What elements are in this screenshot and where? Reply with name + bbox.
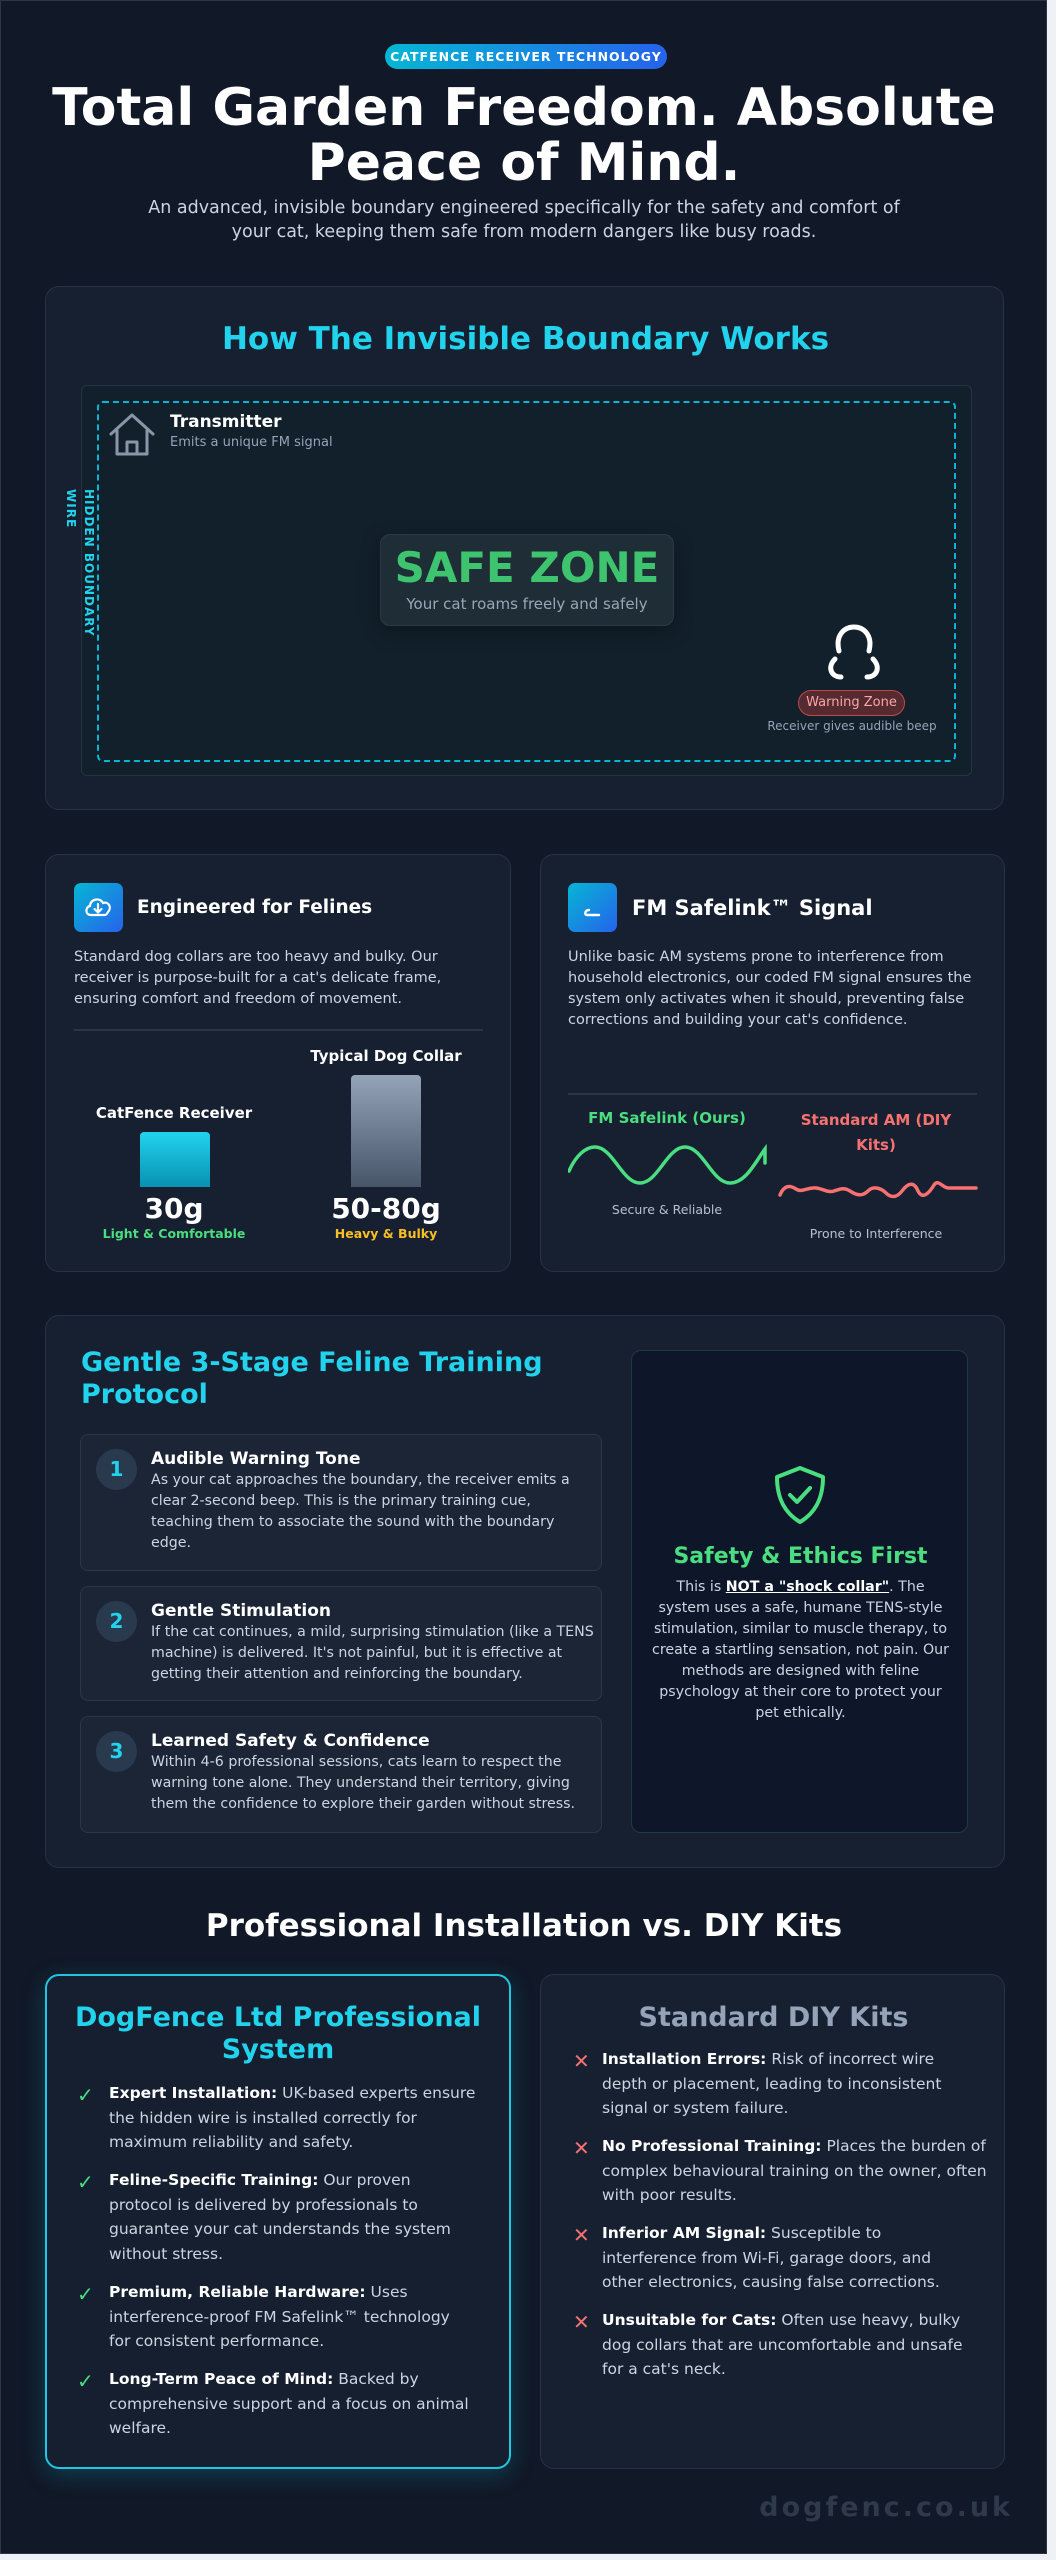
chart: signal comparison: Secure & Reliable: [612, 1202, 722, 1217]
item 4: ✓: [77, 2369, 94, 2393]
panel: engineered for felines: [45, 854, 511, 1272]
chart: weight comparison: [96, 1047, 462, 1241]
step 1: Audible Warning Tone: [151, 1449, 360, 1469]
item 3: Premium, Reliable Hardware: Uses interference-proof FM Safelink™ technology for consistent performance.: [109, 2283, 450, 2350]
transmitter label: Transmitter: [170, 412, 282, 432]
step 3: Within 4-6 professional sessions, cats learn to respect the warning tone alone. They understand their territory, giving them the confidence to explore their garden without stress.: [151, 1754, 575, 1812]
step 2: Gentle Stimulation: [151, 1601, 331, 1621]
item 2: ✓: [77, 2170, 94, 2194]
icon: shield: [775, 1466, 825, 1524]
chart: weight comparison: 50-80g: [331, 1192, 441, 1225]
safety text: This is NOT a "shock collar". The system uses a safe, humane TENS-style stimulation, similar to muscle therapy, to create a startling sensation, not pain. Our methods are designed with feline psychology at their core to protect your pet ethically.: [652, 1579, 949, 1721]
step 3: [80, 1716, 602, 1833]
badge: [385, 44, 667, 69]
panel: professional: [45, 1974, 511, 2469]
chart: weight comparison: Typical Dog Collar: [310, 1047, 462, 1065]
heading: comparison: Professional Installation vs. DIY Kits: [206, 1908, 842, 1944]
text: Standard dog collars are too heavy and bulky. Our receiver is purpose-built for a cat's delicate frame, ensuring comfort and freedom of movement.: [74, 949, 441, 1007]
chart: weight comparison: Heavy & Bulky: [335, 1226, 437, 1241]
step 3: Learned Safety & Confidence: [151, 1731, 430, 1751]
item 3: ✕: [573, 2223, 590, 2247]
chart: signal comparison: FM Safelink (Ours): [588, 1109, 746, 1127]
chart: weight comparison: Light & Comfortable: [103, 1226, 245, 1241]
warning zone: [798, 690, 905, 716]
chart: weight comparison: 30g: [144, 1192, 204, 1225]
heading: [81, 1347, 543, 1410]
icon: cloud: [74, 883, 123, 932]
label: hidden boundary wire: HIDDEN BOUNDARY: [82, 489, 96, 637]
heading: How The Invisible Boundary Works: [222, 321, 829, 357]
item 3: ✓: [77, 2282, 94, 2306]
item 4: Unsuitable for Cats: Often use heavy, bulky dog collars that are uncomfortable and unsafe for a cat's neck.: [602, 2311, 963, 2378]
label: hidden boundary wire: [64, 489, 96, 637]
step 2: [80, 1586, 602, 1701]
heading: Standard DIY Kits: [639, 2002, 908, 2033]
label: hidden boundary wire: WIRE: [64, 489, 78, 528]
panel: fm safelink: [540, 854, 1005, 1272]
icon: cat receiver: [828, 624, 880, 680]
safety heading: Safety & Ethics First: [673, 1544, 928, 1569]
panel: how it works: [45, 286, 1004, 810]
chart: weight comparison: CatFence Receiver: [96, 1104, 252, 1122]
safe zone: SAFE ZONE: [395, 543, 659, 592]
heading: DogFence Ltd Professional: [75, 2002, 481, 2033]
title: Total Garden Freedom. Absolute: [52, 78, 996, 138]
chart: signal comparison: Prone to Interference: [810, 1226, 942, 1241]
safe zone: [380, 534, 674, 626]
text: Unlike basic AM systems prone to interference from household electronics, our coded FM signal ensures the system only activates when it should, preventing false corrections and building your cat's confidence.: [568, 949, 971, 1028]
transmitter label: Emits a unique FM signal: [170, 435, 333, 450]
warning zone: Warning Zone: [806, 695, 897, 710]
item 3: Inferior AM Signal: Susceptible to interference from Wi-Fi, garage doors, and other electronics, causing false corrections.: [602, 2224, 940, 2291]
heading: Engineered for Felines: [137, 897, 372, 918]
item 1: ✕: [573, 2049, 590, 2073]
item 1: Expert Installation: UK-based experts ensure the hidden wire is installed correctly for maximum reliability and safety.: [109, 2084, 475, 2151]
chart: signal comparison: Standard AM (DIY Kits): [801, 1111, 951, 1154]
footer watermark: dogfenc.co.uk: [759, 2492, 1013, 2523]
subtitle: An advanced, invisible boundary engineered specifically for the safety and comfort of your cat, keeping them safe from modern dangers like busy roads.: [148, 198, 900, 242]
safe zone: Your cat roams freely and safely: [406, 595, 648, 613]
badge: CATFENCE RECEIVER TECHNOLOGY: [390, 49, 662, 64]
item 4: ✕: [573, 2310, 590, 2334]
icon: signal: [568, 883, 617, 932]
warning caption: Receiver gives audible beep: [767, 719, 937, 733]
panel: training protocol: [45, 1315, 1005, 1868]
step 2: If the cat continues, a mild, surprising stimulation (like a TENS machine) is delivered. It's not painful, but it is effective at getting their attention and reinforcing the boundary.: [151, 1624, 594, 1682]
safety card: [631, 1350, 968, 1833]
item 4: Long-Term Peace of Mind: Backed by comprehensive support and a focus on animal welfare.: [109, 2370, 469, 2437]
step 1: [80, 1434, 602, 1571]
item 1: ✓: [77, 2083, 94, 2107]
step 1: As your cat approaches the boundary, the receiver emits a clear 2-second beep. This is the primary training cue, teaching them to associate the sound with the boundary edge.: [151, 1472, 570, 1551]
heading: FM Safelink™ Signal: [632, 896, 873, 920]
step 2: 2: [110, 1609, 123, 1633]
title: [52, 78, 996, 193]
chart: signal comparison: [568, 1109, 978, 1241]
diagram: [81, 385, 972, 776]
heading: [75, 2002, 481, 2065]
item 2: No Professional Training: Places the burden of complex behavioural training on the owner, often with poor results.: [602, 2137, 987, 2204]
transmitter label: [170, 412, 333, 450]
step 1: 1: [110, 1457, 123, 1481]
item 2: ✕: [573, 2136, 590, 2160]
step 3: 3: [110, 1739, 123, 1763]
item 1: Installation Errors: Risk of incorrect wire depth or placement, leading to inconsistent signal or system failure.: [602, 2050, 941, 2117]
heading: System: [222, 2034, 334, 2065]
icon: house transmitter: [109, 413, 154, 456]
heading: Gentle 3-Stage Feline Training: [81, 1347, 543, 1378]
heading: Protocol: [81, 1379, 208, 1410]
panel: diy kits: [540, 1974, 1005, 2469]
item 2: Feline-Specific Training: Our proven protocol is delivered by professionals to guarantee your cat understands the system without stress.: [109, 2171, 451, 2262]
dashed boundary wire: [97, 401, 956, 762]
title: Peace of Mind.: [308, 133, 740, 193]
